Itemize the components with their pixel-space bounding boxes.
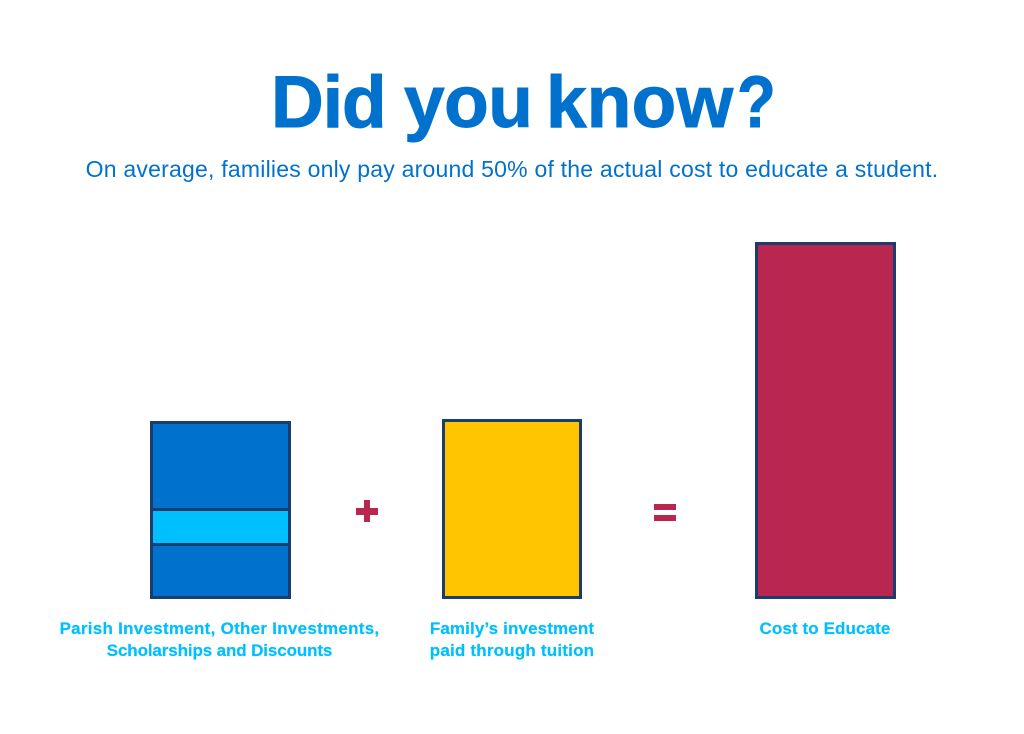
equals sign: [654, 504, 676, 521]
title: ?: [737, 62, 775, 143]
bar: cost to educate: [755, 242, 896, 599]
label: parish investment: Scholarships and Discounts: [107, 641, 332, 660]
bar segment: bottom blue: [150, 543, 291, 599]
bar segment: light blue: [150, 508, 291, 546]
title: you: [404, 62, 532, 143]
plus sign: [356, 500, 378, 522]
label: family's investment: Family’s investment: [430, 619, 594, 638]
bar: family's investment: [442, 419, 582, 599]
title: [271, 62, 775, 143]
bar segment: top blue: [150, 421, 291, 511]
subtitle: On average, families only pay around 50% of the actual cost to educate a student.: [86, 156, 938, 182]
label: parish investment: [60, 619, 379, 660]
label: family's investment: paid through tuition: [430, 641, 594, 660]
title: Did: [271, 62, 386, 143]
label: parish investment: Parish Investment, Other Investments,: [60, 619, 379, 638]
label: family's investment: [430, 619, 594, 660]
title: know: [546, 62, 733, 143]
label: cost to educate: Cost to Educate: [760, 619, 890, 638]
stacked bar: other investments: [150, 421, 291, 599]
